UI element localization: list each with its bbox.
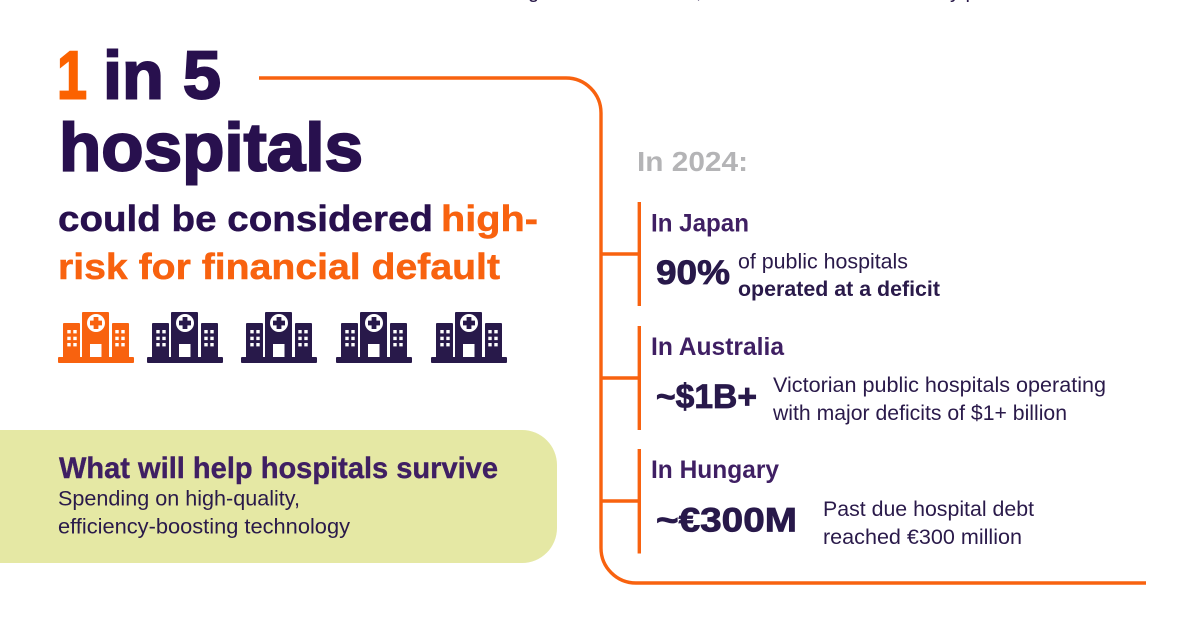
panel: what will help callout	[0, 430, 557, 563]
title: 1 in 5 hospitals: 1	[57, 38, 87, 114]
cropped caption text at top edge	[528, 0, 977, 3]
Australia stat: ~$1B+	[656, 378, 757, 416]
subtitle: high-risk for financial default: could be considered	[58, 198, 433, 239]
Australia text	[772, 373, 1106, 425]
Hungary text: Past due hospital debt	[823, 497, 1034, 521]
title: 1 in 5 hospitals: in 5	[103, 38, 221, 114]
icon: dark hospital 5	[431, 312, 507, 363]
callout heading: What will help hospitals survive	[59, 452, 498, 485]
Australia text: Victorian public hospitals operating	[773, 373, 1106, 397]
subtitle: high-risk for financial default	[58, 198, 538, 287]
heading: In 2024: In 2024:	[637, 146, 748, 177]
icon: orange hospital	[58, 312, 134, 363]
icon: dark hospital 3	[241, 312, 317, 363]
title: 1 in 5 hospitals	[57, 38, 363, 186]
Hungary stat: ~€300M	[656, 502, 797, 540]
Japan text: operated at a deficit	[738, 277, 940, 301]
panel: Hungary	[651, 456, 1034, 549]
Hungary text: reached €300 million	[823, 525, 1022, 549]
Japan text: of public hospitals	[738, 250, 908, 274]
Australia text: with major deficits of $1+ billion	[772, 401, 1067, 425]
callout text	[58, 486, 350, 538]
panel: Japan	[651, 210, 940, 301]
connector lines	[259, 78, 1146, 583]
Japan stat: 90%	[656, 254, 730, 292]
Australia heading: In Australia	[651, 333, 785, 361]
Japan heading: In Japan	[651, 210, 749, 238]
Japan text	[738, 250, 940, 301]
subtitle: high-risk for financial default: high-	[441, 198, 538, 239]
title: 1 in 5 hospitals: hospitals	[59, 110, 363, 186]
icon: dark hospital 4	[336, 312, 412, 363]
Hungary text	[823, 497, 1034, 549]
icon row: hospitals	[58, 312, 507, 363]
callout text: Spending on high-quality,	[58, 486, 300, 510]
subtitle: high-risk for financial default: risk for financial default	[58, 246, 500, 287]
icon: dark hospital 2	[147, 312, 223, 363]
Hungary heading: In Hungary	[651, 456, 779, 484]
panel: Australia	[651, 333, 1106, 425]
callout text: efficiency-boosting technology	[58, 514, 350, 538]
